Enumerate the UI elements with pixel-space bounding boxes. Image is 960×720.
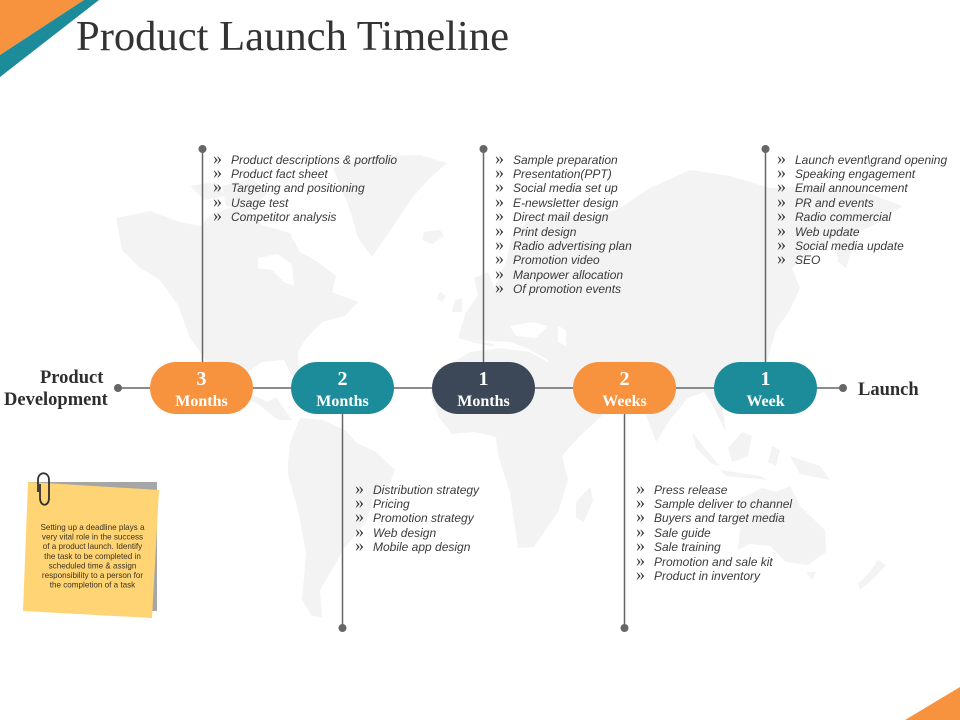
list: 1 months tasks: Promotion video xyxy=(513,253,600,267)
pill: 2 months: Months xyxy=(316,393,369,410)
list: 1 months tasks: » xyxy=(495,205,504,225)
list: 2 weeks tasks: » xyxy=(636,550,645,570)
list: 1 week tasks: SEO xyxy=(795,253,820,267)
list: 3 months tasks: Product descriptions & portfolio xyxy=(231,153,397,167)
list: 3 months tasks: Targeting and positioning xyxy=(231,181,365,195)
pill: 3 months xyxy=(150,362,253,414)
label: product development: Development xyxy=(4,390,109,410)
list: 1 months tasks: » xyxy=(495,191,504,211)
timeline axis xyxy=(114,384,847,392)
list: 1 week tasks: » xyxy=(777,148,786,168)
note text: the task to be completed in xyxy=(44,552,141,561)
list: 1 months tasks: Print design xyxy=(513,225,577,239)
corner accent top-left xyxy=(0,0,99,77)
label: product development: Product xyxy=(40,368,104,388)
list: 1 week tasks: » xyxy=(777,205,786,225)
note text: responsibility to a person for xyxy=(42,571,143,580)
list: 3 months tasks xyxy=(213,148,397,225)
list: 1 months tasks: » xyxy=(495,234,504,254)
pill: 2 weeks xyxy=(573,362,676,414)
list: 2 months tasks: Promotion strategy xyxy=(373,511,475,525)
list: 1 months tasks: Manpower allocation xyxy=(513,268,623,282)
list: 2 months tasks: Web design xyxy=(373,526,436,540)
list: 2 months tasks: Mobile app design xyxy=(373,540,471,554)
list: 1 week tasks: » xyxy=(777,248,786,268)
list: 2 weeks tasks: Buyers and target media xyxy=(654,511,785,525)
list: 3 months tasks: » xyxy=(213,191,222,211)
list: 3 months tasks: » xyxy=(213,148,222,168)
pill: 3 months: 3 xyxy=(196,368,206,390)
list: 1 week tasks: » xyxy=(777,176,786,196)
list: 1 months tasks: » xyxy=(495,263,504,283)
list: 2 weeks tasks: Promotion and sale kit xyxy=(654,555,773,569)
list: 1 months tasks: » xyxy=(495,176,504,196)
list: 1 week tasks: » xyxy=(777,234,786,254)
list: 2 months tasks: Pricing xyxy=(373,497,410,511)
pill: 1 week: 1 xyxy=(760,368,770,390)
list: 1 week tasks: Radio commercial xyxy=(795,210,891,224)
list: 2 weeks tasks: Sale training xyxy=(654,540,721,554)
list: 1 months tasks: » xyxy=(495,148,504,168)
pill: 2 weeks: 2 xyxy=(620,368,630,390)
note text: of a product launch. Identify xyxy=(43,542,143,551)
list: 3 months tasks: » xyxy=(213,162,222,182)
pill: 2 weeks: Weeks xyxy=(602,393,647,410)
connector top 3 xyxy=(480,145,488,362)
list: 2 months tasks: Distribution strategy xyxy=(373,483,480,497)
note text: very vital role in the success xyxy=(42,532,143,542)
list: 2 weeks tasks: » xyxy=(636,521,645,541)
list: 2 weeks tasks: Press release xyxy=(654,483,728,497)
list: 3 months tasks: » xyxy=(213,205,222,225)
note text: Setting up a deadline plays a xyxy=(41,523,145,532)
list: 1 week tasks: Social media update xyxy=(795,239,904,253)
corner accent bottom-right xyxy=(905,687,960,720)
list: 2 months tasks: » xyxy=(355,506,364,526)
list: 2 months tasks xyxy=(355,478,480,555)
connector bottom 4 xyxy=(620,414,628,632)
list: 1 week tasks: Launch event\grand opening xyxy=(795,153,947,167)
label: launch: Launch xyxy=(858,380,919,400)
sticky note xyxy=(23,473,159,618)
list: 3 months tasks: Product fact sheet xyxy=(231,167,328,181)
list: 1 week tasks: » xyxy=(777,220,786,240)
pill: 3 months: Months xyxy=(175,393,228,410)
background world map xyxy=(116,155,902,617)
note text xyxy=(41,523,145,590)
list: 1 months tasks: Sample preparation xyxy=(513,153,618,167)
list: 2 weeks tasks: » xyxy=(636,478,645,498)
list: 1 week tasks: Email announcement xyxy=(795,181,908,195)
label: product development xyxy=(4,368,109,410)
pill: 1 week xyxy=(714,362,817,414)
list: 1 months tasks: » xyxy=(495,220,504,240)
list: 2 months tasks: » xyxy=(355,478,364,498)
connector top 5 xyxy=(762,145,770,362)
pill: 1 week: Week xyxy=(746,393,785,410)
list: 1 months tasks: » xyxy=(495,277,504,297)
connector top 1 xyxy=(198,145,206,362)
list: 3 months tasks: Usage test xyxy=(231,196,289,210)
list: 1 months tasks: Presentation(PPT) xyxy=(513,167,612,181)
list: 1 months tasks xyxy=(495,148,632,297)
list: 1 months tasks: Direct mail design xyxy=(513,210,609,224)
list: 2 months tasks: » xyxy=(355,535,364,555)
pill: 2 months xyxy=(291,362,394,414)
list: 1 week tasks xyxy=(777,148,947,268)
map inland seas xyxy=(258,254,566,350)
list: 1 months tasks: Radio advertising plan xyxy=(513,239,632,253)
list: 1 week tasks: Speaking engagement xyxy=(795,167,916,181)
list: 1 week tasks: Web update xyxy=(795,225,860,239)
pill: 1 months: Months xyxy=(457,393,510,410)
list: 2 weeks tasks: » xyxy=(636,535,645,555)
pill: 2 months: 2 xyxy=(338,368,348,390)
list: 1 months tasks: Of promotion events xyxy=(513,282,621,296)
list: 1 months tasks: Social media set up xyxy=(513,181,618,195)
list: 3 months tasks: Competitor analysis xyxy=(231,210,336,224)
list: 3 months tasks: » xyxy=(213,176,222,196)
list: 1 week tasks: » xyxy=(777,162,786,182)
pill: 1 months xyxy=(432,362,535,414)
list: 2 weeks tasks: Product in inventory xyxy=(654,569,761,583)
list: 1 week tasks: PR and events xyxy=(795,196,874,210)
list: 1 months tasks: E-newsletter design xyxy=(513,196,619,210)
list: 2 weeks tasks: Sale guide xyxy=(654,526,711,540)
list: 2 months tasks: » xyxy=(355,521,364,541)
connector bottom 2 xyxy=(338,414,346,632)
icon: paperclip xyxy=(38,473,49,505)
pill: 1 months: 1 xyxy=(478,368,488,390)
note text: the completion of a task xyxy=(50,580,136,590)
list: 1 months tasks: » xyxy=(495,162,504,182)
list: 2 weeks tasks: » xyxy=(636,492,645,512)
list: 1 months tasks: » xyxy=(495,248,504,268)
list: 2 weeks tasks: » xyxy=(636,564,645,584)
list: 1 week tasks: » xyxy=(777,191,786,211)
note text: scheduled time & assign xyxy=(49,562,136,570)
list: 2 weeks tasks: » xyxy=(636,506,645,526)
list: 2 months tasks: » xyxy=(355,492,364,512)
list: 2 weeks tasks xyxy=(636,478,792,584)
list: 2 weeks tasks: Sample deliver to channel xyxy=(654,497,792,511)
title: Product Launch Timeline xyxy=(76,13,509,60)
